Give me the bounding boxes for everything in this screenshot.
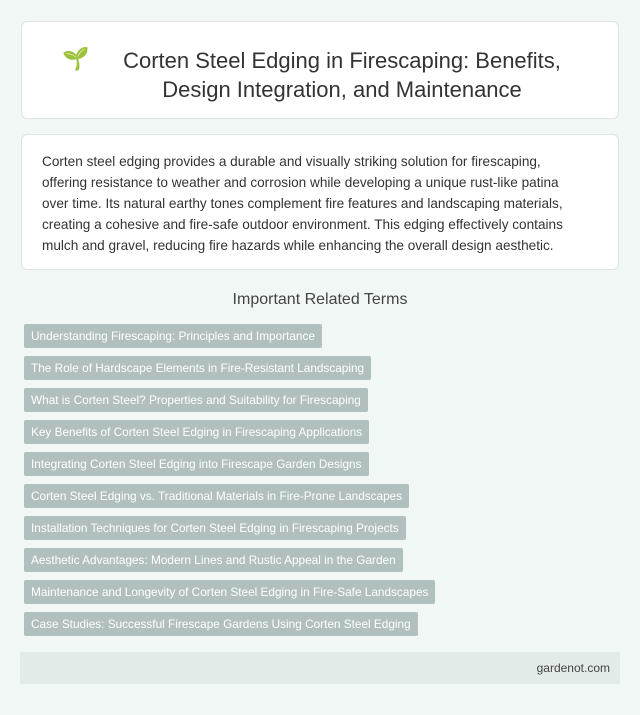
tags list: Integrating Corten Steel Edging into Firescape Garden Designs: [31, 457, 362, 471]
footer: [20, 652, 620, 684]
tags list: [24, 324, 435, 636]
section heading: Important Related Terms: [233, 291, 407, 308]
title: Corten Steel Edging in Firescaping: Benefits, Design Integration, and Maintenance: [123, 48, 561, 102]
summary panel: [21, 134, 619, 270]
icon: sprout: 🌱: [62, 46, 89, 71]
tags list: Understanding Firescaping: Principles and Importance: [31, 329, 315, 343]
footer: gardenot.com: [537, 661, 610, 675]
summary panel: Corten steel edging provides a durable and visually striking solution for firescaping, offering resistance to weather and corrosion while developing a unique rust-like patina over time. Its natural earthy tones complement fire features and landscaping materials, creating a cohesive and fire-safe outdoor environment. This edging effectively contains mulch and gravel, reducing fire hazards while enhancing the overall design aesthetic.: [42, 154, 563, 253]
tags list: Maintenance and Longevity of Corten Steel Edging in Fire-Safe Landscapes: [31, 585, 428, 599]
tags list: What is Corten Steel? Properties and Suitability for Firescaping: [31, 393, 361, 407]
tags list: The Role of Hardscape Elements in Fire-Resistant Landscaping: [31, 361, 364, 375]
tags list: Aesthetic Advantages: Modern Lines and Rustic Appeal in the Garden: [31, 553, 396, 567]
header: [21, 21, 619, 119]
tags list: Case Studies: Successful Firescape Gardens Using Corten Steel Edging: [31, 617, 411, 631]
tags list: Key Benefits of Corten Steel Edging in Firescaping Applications: [31, 425, 362, 439]
tags list: Corten Steel Edging vs. Traditional Materials in Fire-Prone Landscapes: [31, 489, 402, 503]
tags list: Installation Techniques for Corten Steel Edging in Firescaping Projects: [31, 521, 399, 535]
